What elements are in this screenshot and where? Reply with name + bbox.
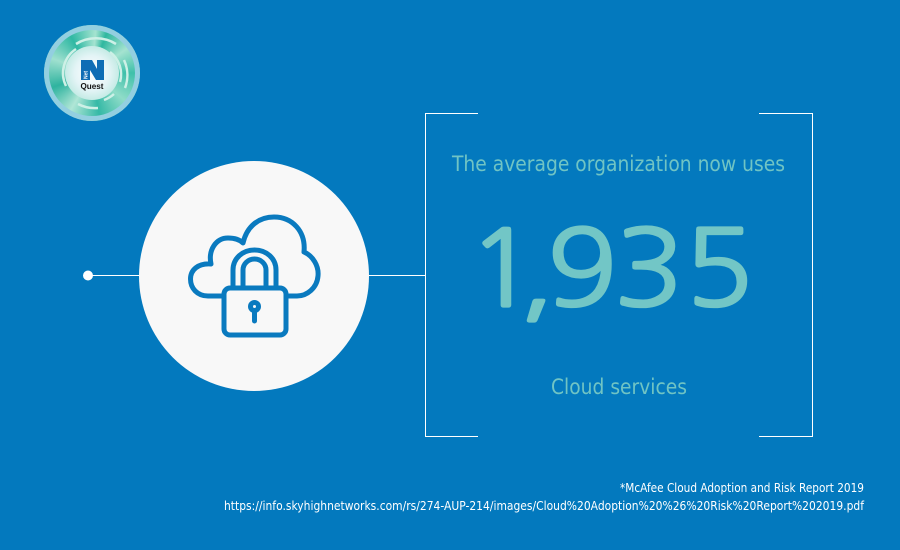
- big number: 1,935: [467, 216, 754, 321]
- white circle with cloud lock icon: [139, 161, 369, 391]
- label: cloud services: Cloud services: [551, 375, 687, 399]
- logo: NetQuest badge: Net: [84, 71, 90, 79]
- heading: average organization: The average organization now uses: [451, 152, 785, 176]
- logo: NetQuest badge: Quest: [80, 81, 104, 91]
- stat frame brackets: [426, 114, 812, 436]
- source citation: [224, 481, 865, 513]
- source citation: *McAfee Cloud Adoption and Risk Report 2019: [620, 481, 864, 495]
- connector line with dot: [83, 270, 425, 280]
- logo: NetQuest badge: [44, 25, 140, 121]
- icon: cloud and padlock: [190, 217, 318, 335]
